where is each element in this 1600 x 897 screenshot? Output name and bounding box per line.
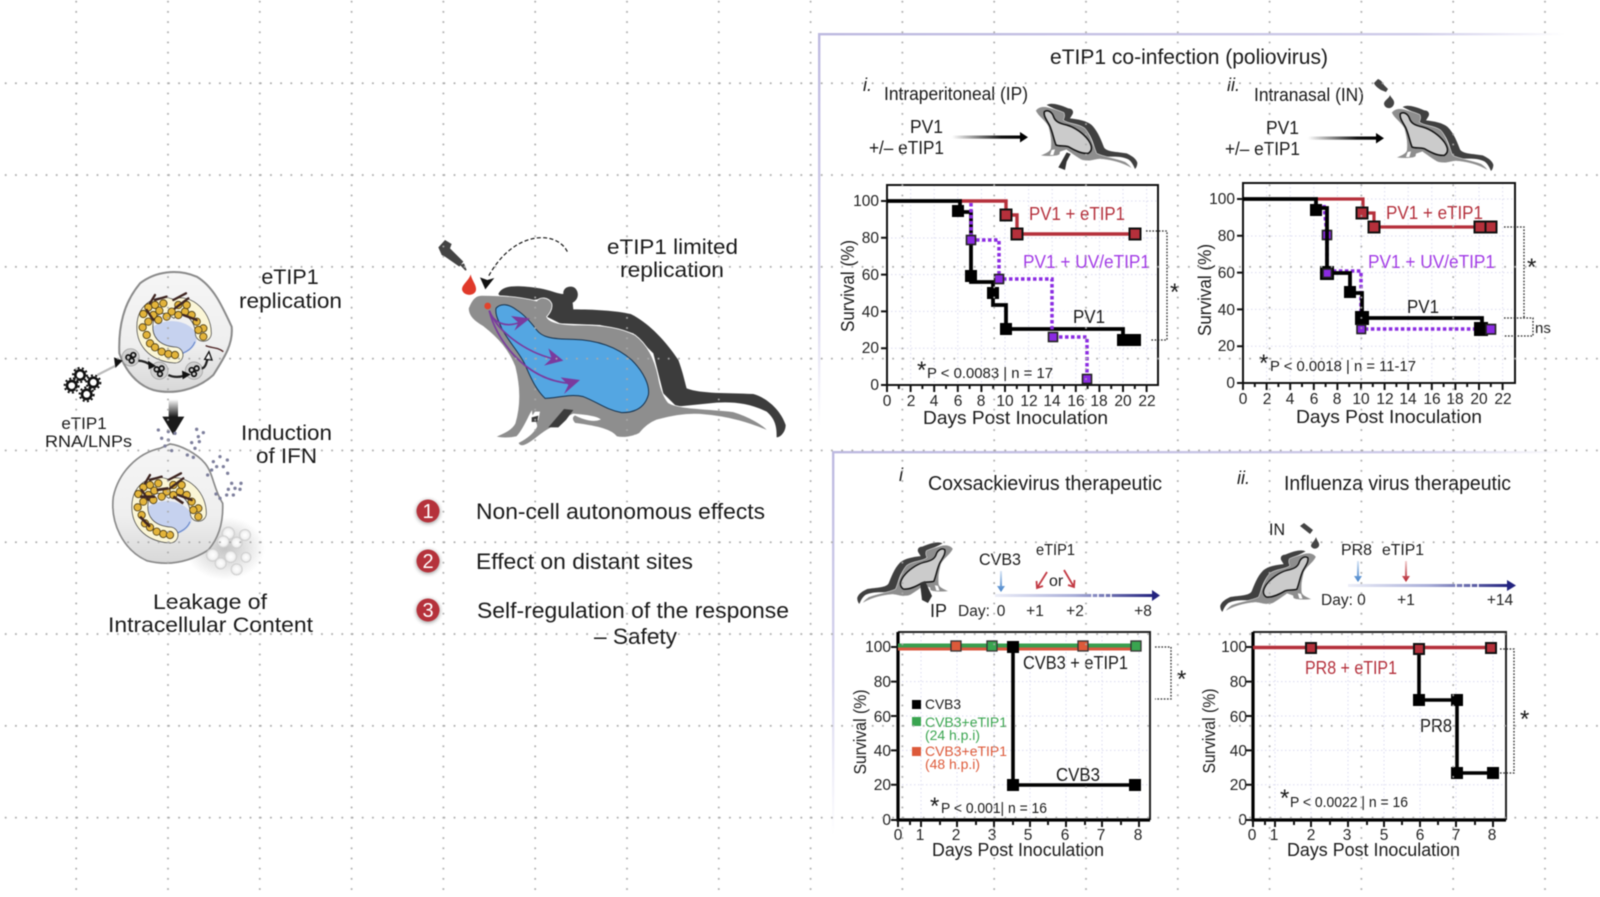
- significance bracket: [1155, 647, 1171, 699]
- x-axis labels: 2: [952, 827, 960, 844]
- legend: CVB3+eTIP1: [925, 743, 1007, 759]
- legend: [912, 696, 1007, 772]
- illustration: mouse with intranasal spread: [468, 286, 786, 446]
- timeline arrow: [995, 590, 1160, 601]
- label: eTIP1 RNA/LNPs line 1: eTIP1: [61, 414, 107, 433]
- icon: red droplet: [462, 274, 476, 295]
- timeline labels: +2: [1066, 603, 1084, 620]
- annotation: bracket star: *: [1170, 279, 1179, 306]
- y-axis labels: 20: [1218, 338, 1235, 355]
- y-axis labels: 80: [862, 230, 879, 247]
- series: CVB3: [1007, 641, 1141, 791]
- label: eTIP1 replication: eTIP1: [261, 265, 319, 289]
- x-axis title: Days Post Inoculation: [1296, 406, 1482, 427]
- x-axis labels: 7: [1097, 827, 1105, 844]
- annotation: star: *: [1280, 785, 1289, 812]
- x-axis labels: 18: [1446, 391, 1464, 408]
- x-axis labels: 1: [916, 827, 924, 844]
- list: numbered effects: [416, 499, 789, 649]
- sub-panel i: coxsackievirus header: [857, 465, 1162, 621]
- label: ii.: ii.: [1227, 75, 1240, 95]
- bottom cell: induction of IFN and leakage: [113, 428, 265, 580]
- sub-panel i: intraperitoneal header: [863, 75, 1137, 170]
- label: eTIP1: eTIP1: [1382, 542, 1424, 559]
- timeline labels: +1: [1397, 592, 1415, 609]
- label: PV1 + UV/eTIP1: PV1 + UV/eTIP1: [1368, 252, 1495, 272]
- label: replication: replication: [620, 258, 724, 282]
- text: effect 1: Non-cell autonomous effects: [476, 499, 765, 524]
- x-axis labels: 22: [1138, 393, 1156, 410]
- arrow: [952, 132, 1028, 142]
- y-axis labels: [853, 193, 879, 394]
- y-axis labels: 80: [1218, 228, 1235, 245]
- label: CVB3: CVB3: [979, 550, 1021, 569]
- label: PV1: PV1: [1407, 297, 1439, 317]
- heading: influenza: Influenza virus therapeutic: [1284, 473, 1511, 495]
- label: +/- eTIP1: +/– eTIP1: [869, 138, 944, 158]
- y-axis labels: [865, 639, 891, 829]
- x-axis labels: 2: [907, 393, 915, 410]
- icon: mouse with intranasal dropper: [1374, 79, 1493, 171]
- icon: mouse with IP syringe: [1036, 104, 1137, 170]
- x-axis labels: 1: [1270, 827, 1278, 844]
- series: PR8 + eTIP1: [1253, 643, 1496, 654]
- heading: co-infection: eTIP1 co-infection (poliovirus): [1050, 46, 1328, 69]
- panel: cell infection schematic: [45, 265, 342, 637]
- label: eTIP1 RNA/LNPs line 2: RNA/LNPs: [45, 432, 132, 451]
- icon: mouse with IP syringe: [857, 542, 953, 604]
- timeline labels: 0: [997, 603, 1006, 620]
- x-axis labels: 5: [1380, 827, 1388, 844]
- y-axis labels: 100: [853, 193, 879, 210]
- label: Induction: Induction: [241, 421, 332, 445]
- timeline labels: Day:: [958, 603, 990, 620]
- x-axis labels: 8: [1333, 391, 1341, 408]
- label: PR8: PR8: [1420, 716, 1452, 736]
- arrow: PR8 dose: [1354, 561, 1362, 582]
- x-axis labels: 22: [1494, 391, 1512, 408]
- x-axis labels: 7: [1452, 827, 1460, 844]
- legend: (24 h.p.i): [925, 727, 980, 743]
- chart: PR8 survival: [1199, 632, 1529, 860]
- panel: eTIP1 co-infection (poliovirus): [818, 33, 1566, 430]
- x-axis labels: 3: [1343, 827, 1351, 844]
- y-axis labels: 0: [870, 377, 879, 394]
- timeline labels: [958, 603, 1152, 620]
- x-axis labels: [1248, 827, 1496, 844]
- sub-panel ii: influenza header: [1220, 468, 1516, 612]
- top cell: eTIP1 replication: [114, 272, 232, 392]
- x-axis labels: 4: [1286, 391, 1295, 408]
- x-axis labels: 12: [1020, 393, 1038, 410]
- x-axis labels: 0: [894, 827, 903, 844]
- timeline labels: +8: [1134, 603, 1152, 620]
- bullet 3: 3: [422, 600, 434, 622]
- label: replication: replication: [239, 289, 342, 313]
- series: PV1 + eTIP1: [1316, 199, 1496, 232]
- timeline labels: +1: [1026, 603, 1044, 620]
- y-axis labels: 60: [1230, 709, 1247, 726]
- label: IN: IN: [1269, 520, 1285, 539]
- y-axis labels: 0: [1226, 375, 1235, 392]
- label: ii.: ii.: [1237, 468, 1250, 488]
- label: PV1 + UV/eTIP1: PV1 + UV/eTIP1: [1023, 252, 1150, 272]
- x-axis labels: 2: [1307, 827, 1315, 844]
- series: PV1: [887, 201, 1141, 346]
- label: CVB3: CVB3: [1056, 765, 1100, 785]
- label: CVB3 + eTIP1: CVB3 + eTIP1: [1023, 653, 1128, 673]
- y-axis labels: [1209, 191, 1235, 392]
- x-axis labels: 0: [883, 393, 892, 410]
- annotation: p-value: P < 0.0083 | n = 17: [927, 365, 1053, 382]
- arrow: [1308, 133, 1384, 144]
- arrow: cell to cell: [162, 399, 184, 435]
- y-axis title: Survival (%): [1195, 244, 1215, 336]
- heading: coxsackievirus: Coxsackievirus therapeutic: [928, 473, 1162, 495]
- x-axis labels: 5: [1024, 827, 1032, 844]
- series: PV1 + eTIP1: [960, 201, 1140, 240]
- y-axis labels: 100: [1221, 639, 1247, 656]
- label: PR8 + eTIP1: PR8 + eTIP1: [1305, 658, 1397, 678]
- series: CVB3 + eTIP1 24 h: [898, 644, 1136, 648]
- y-axis labels: 20: [1230, 777, 1247, 794]
- bullet 2: 2: [422, 551, 434, 573]
- y-axis title: Survival (%): [850, 690, 870, 774]
- series: PV1: [1243, 199, 1496, 336]
- label: PV1 + eTIP1: PV1 + eTIP1: [1386, 203, 1483, 223]
- x-axis title: Days Post Inoculation: [932, 839, 1104, 860]
- x-axis labels: 18: [1090, 393, 1108, 410]
- legend: CVB3+eTIP1: [925, 714, 1007, 730]
- timeline labels: [1321, 592, 1514, 609]
- bullet 2: [416, 550, 440, 573]
- y-axis title: Survival (%): [1199, 688, 1219, 774]
- annotation: p-value: P < 0.0018 | n = 11-17: [1270, 358, 1416, 375]
- significance bracket: [1500, 649, 1514, 773]
- x-axis labels: 20: [1114, 393, 1132, 410]
- arrow: CVB3 dose: [997, 571, 1005, 592]
- x-axis labels: 6: [1061, 827, 1069, 844]
- label: PV1: PV1: [1073, 307, 1105, 327]
- x-axis labels: 2: [1263, 391, 1271, 408]
- legend: (48 h.p.i): [925, 756, 980, 772]
- x-axis labels: 14: [1399, 391, 1417, 408]
- series: PR8: [1413, 649, 1499, 779]
- arrow: dashed curve to nose: [480, 238, 567, 289]
- annotation: ns: ns: [1535, 320, 1551, 337]
- x-axis labels: 8: [1488, 827, 1496, 844]
- label: eTIP1: eTIP1: [1036, 542, 1075, 559]
- label: or: or: [1049, 573, 1064, 590]
- bullet 1: [416, 500, 440, 523]
- x-axis labels: 3: [988, 827, 996, 844]
- x-axis labels: 6: [1310, 391, 1318, 408]
- x-axis labels: 10: [996, 393, 1014, 410]
- y-axis labels: 20: [862, 340, 879, 357]
- panel: therapeutic experiments: [832, 451, 1566, 860]
- text: effect 2: Effect on distant sites: [476, 549, 693, 574]
- x-axis labels: [894, 827, 1142, 844]
- significance brackets: [1504, 227, 1533, 336]
- x-axis labels: 0: [1239, 391, 1248, 408]
- x-axis labels: 8: [1134, 827, 1142, 844]
- panel: mouse with limited replication: [438, 235, 786, 446]
- annotation: bracket star: *: [1527, 254, 1536, 281]
- annotation: p-value: P < 0.001| n = 16: [941, 800, 1047, 817]
- label: eTIP1 limited: eTIP1 limited: [607, 235, 738, 259]
- label: route: Intranasal (IN): [1254, 85, 1364, 105]
- x-axis labels: 4: [930, 393, 939, 410]
- y-axis labels: 40: [874, 743, 891, 760]
- label: route: Intraperitoneal (IP): [884, 84, 1028, 104]
- icon: dropper: [438, 240, 467, 271]
- annotation: bracket star: *: [1520, 706, 1529, 733]
- series: PV1 + UV/eTIP1: [1322, 205, 1491, 329]
- y-axis labels: 20: [874, 777, 891, 794]
- y-axis labels: 60: [862, 267, 879, 284]
- y-axis labels: 40: [1230, 743, 1247, 760]
- label: PV1: PV1: [910, 117, 943, 137]
- label: of IFN: of IFN: [256, 444, 317, 468]
- y-axis labels: 40: [1218, 302, 1235, 319]
- arrow: eTIP1 dose 2: [1064, 570, 1074, 587]
- y-axis labels: 60: [1218, 265, 1235, 282]
- icon: lipid nanoparticles: [65, 366, 115, 401]
- chart: IN survival: [1195, 183, 1551, 427]
- label: PV1: PV1: [1266, 118, 1299, 138]
- label: Leakage of: Leakage of: [153, 590, 267, 614]
- icon: dropper: [1300, 523, 1319, 549]
- icon: mouse: [1220, 550, 1316, 612]
- x-axis title: Days Post Inoculation: [1287, 839, 1460, 860]
- y-axis labels: 100: [1209, 191, 1235, 208]
- x-axis labels: 14: [1043, 393, 1061, 410]
- text: safety: – Safety: [594, 624, 677, 649]
- y-axis title: Survival (%): [838, 240, 858, 332]
- bullet 1: 1: [422, 501, 434, 523]
- label: PR8: PR8: [1341, 542, 1372, 559]
- label: IP: IP: [930, 601, 947, 621]
- markers: treated groups: [951, 641, 1141, 651]
- annotation: star: *: [917, 357, 926, 384]
- timeline labels: +14: [1487, 592, 1514, 609]
- label: PV1 + eTIP1: PV1 + eTIP1: [1029, 204, 1125, 224]
- label: i.: i.: [863, 75, 872, 95]
- x-axis labels: 16: [1423, 391, 1441, 408]
- x-axis labels: 8: [977, 393, 985, 410]
- y-axis labels: 40: [862, 304, 879, 321]
- x-axis labels: 6: [1416, 827, 1424, 844]
- x-axis labels: 20: [1470, 391, 1488, 408]
- x-axis labels: 6: [954, 393, 962, 410]
- label: +/- eTIP1: +/– eTIP1: [1225, 139, 1300, 159]
- timeline arrow: [1348, 580, 1516, 591]
- y-axis labels: 100: [865, 639, 891, 656]
- x-axis labels: 0: [1248, 827, 1257, 844]
- legend: CVB3: [925, 696, 961, 712]
- significance bracket: [1146, 231, 1167, 340]
- text: effect 3: Self-regulation of the response: [477, 598, 789, 623]
- x-axis labels: 12: [1376, 391, 1394, 408]
- annotation: star: *: [930, 793, 939, 820]
- y-axis labels: [1221, 639, 1247, 829]
- x-axis labels: [883, 393, 1156, 410]
- annotation: star: *: [1259, 350, 1268, 377]
- arrow: eTIP1 dose: [1402, 561, 1410, 582]
- series: PV1 + UV/eTIP1: [966, 203, 1092, 384]
- timeline labels: Day: 0: [1321, 592, 1366, 609]
- series: CVB3 + eTIP1 48 h: [898, 648, 1136, 650]
- y-axis labels: 60: [874, 709, 891, 726]
- annotation: bracket star: *: [1177, 666, 1186, 693]
- x-axis labels: 16: [1067, 393, 1085, 410]
- sub-panel ii: intranasal header: [1225, 75, 1493, 171]
- bullet 3: [416, 598, 440, 622]
- y-axis labels: 80: [874, 674, 891, 691]
- x-axis labels: 10: [1352, 391, 1370, 408]
- label: i: i: [899, 465, 904, 485]
- arrow: eTIP1 dose 1: [1036, 572, 1047, 588]
- y-axis labels: 0: [882, 812, 891, 829]
- y-axis labels: 0: [1238, 812, 1247, 829]
- y-axis labels: 80: [1230, 674, 1247, 691]
- annotation: p-value: P < 0.0022 | n = 16: [1290, 794, 1408, 811]
- x-axis labels: [1239, 391, 1512, 408]
- label: Intracellular Content: Intracellular Content: [108, 613, 313, 637]
- chart: IP survival: [838, 185, 1179, 428]
- x-axis title: Days Post Inoculation: [923, 407, 1108, 428]
- chart: CVB3 survival: [850, 632, 1186, 860]
